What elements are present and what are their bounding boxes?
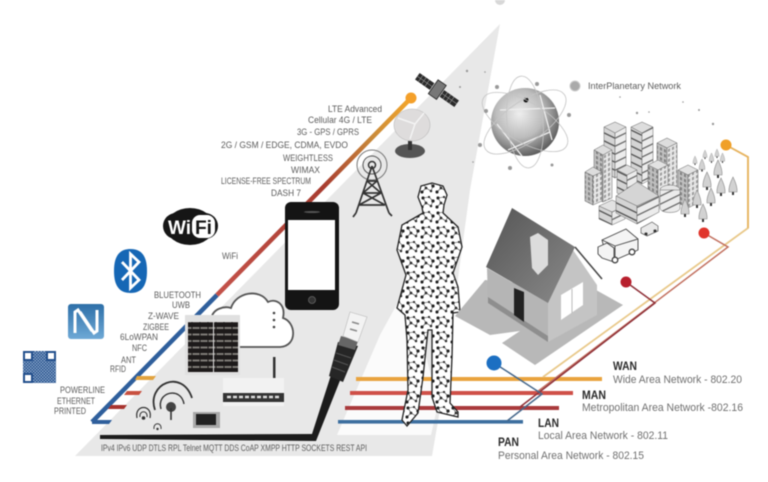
MAN node	[698, 228, 710, 238]
left stubs of network bars	[92, 376, 156, 424]
tower: right mid	[648, 160, 668, 202]
network bars	[338, 377, 602, 424]
labels: short-range technologies: ZIGBEE	[143, 322, 169, 332]
icon: small van	[641, 222, 658, 236]
label: WAN	[613, 361, 742, 386]
connector: WAN	[543, 140, 748, 377]
icon: server rack	[185, 315, 240, 375]
label: MAN: MAN	[582, 390, 606, 402]
pyramid roof building	[616, 182, 659, 224]
icon: router	[223, 357, 284, 406]
label: MAN: Metropolitan Area Network -802.16	[582, 402, 743, 414]
connector: PAN	[486, 356, 542, 421]
labels: cellular technologies: LICENSE-FREE SPECTRUM	[221, 176, 311, 186]
tower: mid left	[594, 145, 612, 202]
label: MAN	[582, 390, 743, 414]
icon: microchip	[193, 412, 220, 428]
low block	[599, 200, 625, 225]
icon: wireless antenna arcs	[137, 382, 192, 430]
logo: Wi-Fi: Wi	[168, 218, 191, 239]
label: LAN: LAN	[538, 418, 559, 430]
labels: cellular technologies	[221, 104, 382, 198]
icon: satellite dish	[394, 109, 430, 158]
panel: white wedge behind the network bars	[337, 284, 438, 435]
labels: short-range technologies: 6LoWPAN	[120, 332, 158, 342]
tower: far right	[678, 165, 698, 208]
label: PAN	[498, 437, 644, 462]
labels: cellular technologies: WIMAX	[291, 165, 320, 175]
icon: city buildings	[585, 122, 698, 225]
icon: QR code	[23, 351, 56, 383]
logo: NFC	[68, 304, 104, 339]
logo: Wi-Fi: Fi	[195, 218, 212, 239]
icon: small planet	[570, 81, 580, 91]
label: WAN: Wide Area Network - 802.20	[613, 374, 742, 386]
icon: cell tower	[353, 150, 392, 217]
label: WAN: WAN	[613, 361, 637, 373]
connector: metro	[520, 276, 655, 407]
orange node	[406, 92, 416, 104]
labels: short-range technologies: PRINTED	[54, 406, 86, 416]
tower: centre	[617, 165, 637, 198]
label: LAN: Local Area Network - 802.11	[538, 430, 668, 442]
label: protocols: IPv4 IPv6 UDP DTLS RPL Telnet MQTT DDS CoAP XMPP HTTP SOCKETS REST API	[101, 443, 367, 453]
tower: back right	[657, 138, 677, 194]
labels: short-range technologies: RFID	[110, 364, 126, 374]
tower: front left	[585, 167, 602, 205]
labels: cellular technologies: Cellular 4G / LTE	[308, 115, 372, 125]
logo: Bluetooth	[114, 249, 147, 293]
label: PAN: Personal Area Network - 802.15	[498, 450, 644, 462]
icon: globe with orbits	[473, 75, 577, 170]
label: InterPlanetary Network: InterPlanetary Network	[588, 81, 681, 91]
icon: house	[455, 208, 623, 365]
labels: cellular technologies: 3G - GPS / GPRS	[297, 127, 359, 137]
panel: gray perspective fan	[75, 24, 500, 456]
logo: Wi-Fi	[163, 208, 218, 245]
icon: pine trees	[681, 149, 737, 222]
tower: back centre	[631, 122, 653, 184]
tower: back left	[604, 122, 626, 178]
labels: cellular technologies: WEIGHTLESS	[283, 153, 333, 163]
PAN node	[486, 356, 502, 370]
label: PAN: PAN	[498, 437, 519, 449]
labels: short-range technologies: NFC	[132, 343, 147, 353]
icon: satellite	[413, 69, 462, 110]
icon: ethernet cable	[100, 312, 367, 441]
icon: cloud	[211, 293, 293, 347]
labels: cellular technologies: 2G / GSM / EDGE, CDMA, EVDO	[221, 140, 348, 150]
labels: short-range technologies: BLUETOOTH	[154, 290, 201, 300]
icon: smartphone	[285, 202, 339, 310]
labels: cellular technologies: LTE Advanced	[328, 104, 382, 114]
labels: short-range technologies: ETHERNET	[57, 396, 95, 406]
diagonal connection line to satellite	[92, 92, 416, 422]
metro node	[620, 276, 632, 288]
icon: person made of network nodes	[397, 183, 462, 426]
labels: short-range technologies: Z-WAVE	[148, 311, 179, 321]
connector: MAN	[537, 228, 728, 392]
labels: short-range technologies: POWERLINE	[60, 385, 105, 395]
labels: cellular technologies: DASH 7	[271, 188, 301, 198]
icon: scattered stars	[459, 70, 714, 163]
label: WiFi: WiFi	[222, 251, 238, 261]
icon: delivery truck	[598, 229, 638, 263]
labels: short-range technologies: ANT	[121, 355, 136, 365]
labels: short-range technologies	[54, 290, 201, 416]
label: LAN	[538, 418, 668, 442]
labels: short-range technologies: UWB	[172, 300, 190, 310]
WAN node	[720, 140, 732, 150]
top node dot	[495, 0, 505, 5]
rounded building	[660, 185, 680, 212]
